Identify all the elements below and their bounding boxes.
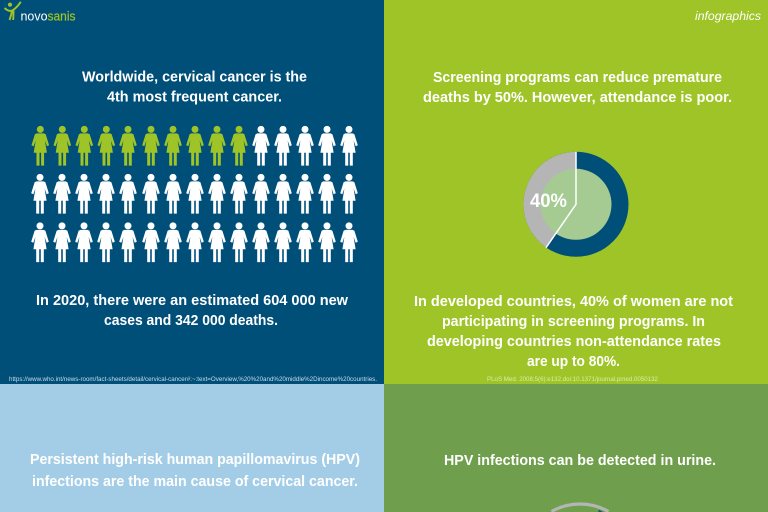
text: 2020 statistics: cases and 342 000 deaths.	[104, 313, 278, 329]
heading: urine detection: HPV infections can be detected in urine.	[444, 453, 716, 469]
heading: HPV cause: Persistent high-risk human papillomavirus (HPV)	[30, 452, 360, 468]
pictogram: women, 10 of 45 highlighted	[31, 126, 358, 262]
text: developed and developing countries: are up to 80%.	[527, 354, 620, 370]
source: PLoS Med: PLoS Med. 2008;5(6):e132.doi:10.1371/journal.pmed.0050132	[487, 376, 658, 383]
logo: novosanis: novo	[20, 8, 48, 24]
donut chart: 40% not participating: 40%	[530, 191, 567, 212]
icon: partially visible circle	[552, 504, 608, 512]
panel: HPV cause	[0, 384, 384, 512]
text: developed and developing countries: participating in screening programs. In	[442, 314, 705, 330]
panel: screening attendance	[384, 0, 768, 384]
text: developed and developing countries: developing countries non-attendance rates	[427, 334, 721, 350]
text: 2020 statistics: In 2020, there were an estimated 604 000 new	[36, 293, 349, 309]
logo: novosanis: sanis	[48, 8, 76, 24]
heading: worldwide: Worldwide, cervical cancer is the	[82, 70, 307, 86]
donut chart: 40% not participating	[523, 152, 628, 257]
panel: worldwide incidence	[0, 0, 384, 384]
source: WHO: https://www.who.int/news-room/fact-sheets/detail/cervical-cancer#:~:text=Overview,%20%20and%20middle%2Dincome%20countries.	[9, 376, 377, 383]
label: infographics: infographics	[695, 11, 761, 23]
heading: HPV cause: infections are the main cause of cervical cancer.	[32, 474, 358, 490]
text: developed and developing countries: In developed countries, 40% of women are not	[414, 294, 733, 310]
heading: screening: deaths by 50%. However, attendance is poor.	[423, 90, 732, 106]
heading: worldwide: 4th most frequent cancer.	[107, 90, 282, 106]
logo: novosanis	[4, 2, 76, 24]
heading: screening: Screening programs can reduce premature	[433, 70, 722, 86]
panel: urine detection	[384, 384, 768, 512]
